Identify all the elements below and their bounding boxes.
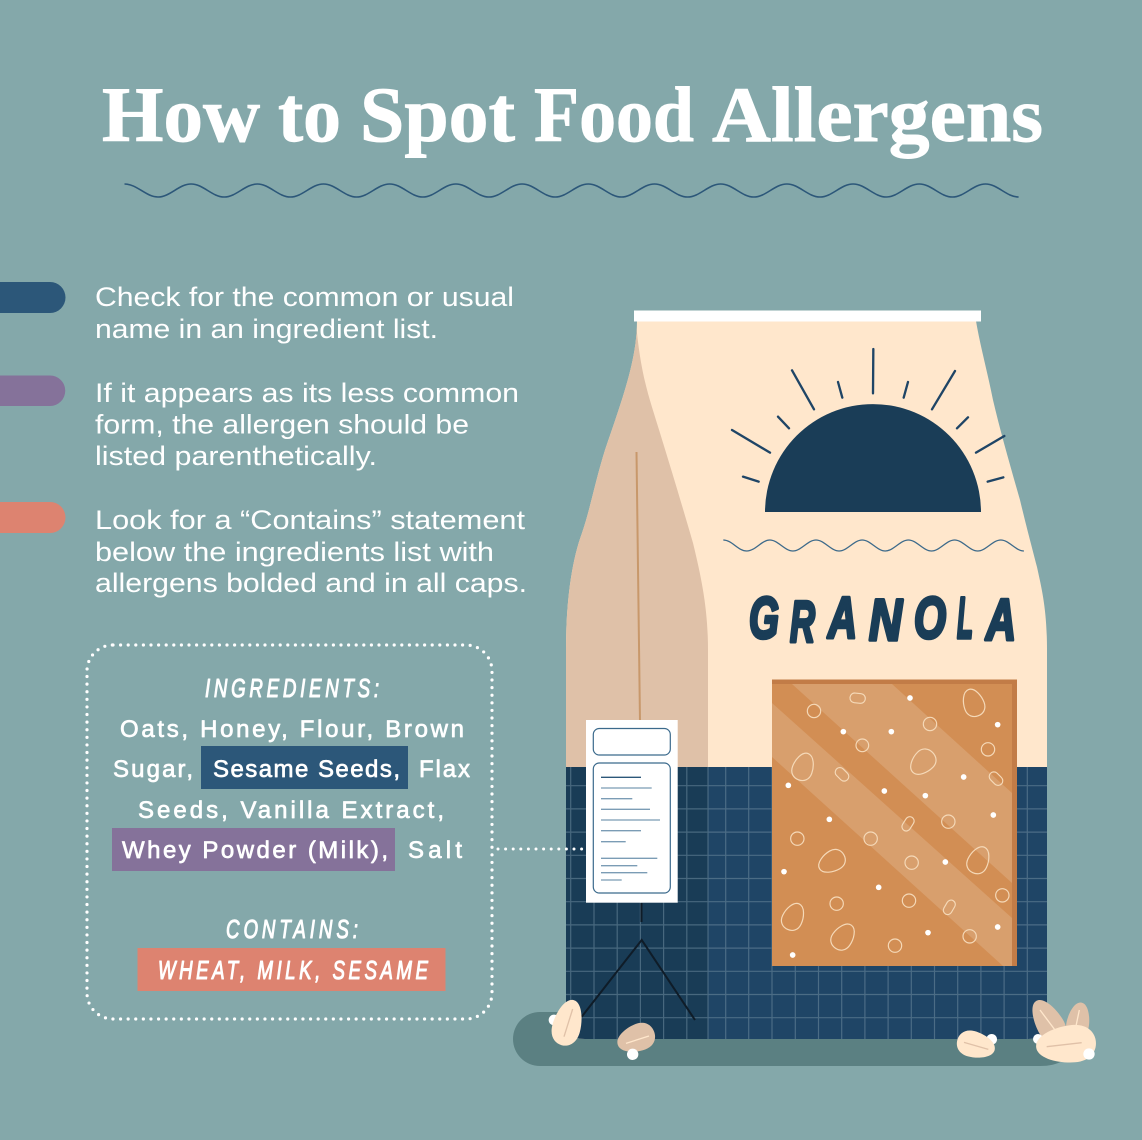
tip 1 text (95, 282, 514, 344)
ingredients heading: INGREDIENTS: (205, 673, 379, 703)
title (102, 71, 1043, 158)
granola bag (498, 310, 1098, 1066)
ingredient line 4: Salt (408, 837, 462, 864)
label header box (593, 728, 670, 755)
window base (772, 680, 1017, 966)
ground shadow (513, 1012, 1073, 1066)
centre fold line (636, 452, 640, 722)
tip 3 text: allergens bolded and in all caps. (95, 568, 527, 598)
bag ingredient label (586, 720, 678, 903)
granola window (772, 680, 1017, 966)
bag side base (560, 767, 708, 1047)
dotted connector from callout to bag label (498, 848, 586, 850)
ingredient line 3: Seeds, Vanilla Extract, (138, 797, 444, 824)
bag body (560, 315, 1055, 1047)
title: Allergens (712, 71, 1043, 158)
granola pieces (778, 686, 1009, 958)
tip 1 text: Check for the common or usual (95, 282, 514, 312)
tip 3 text: Look for a “Contains” statement (95, 505, 526, 535)
tip 2 text: If it appears as its less common (95, 378, 519, 408)
granola wordmark: O (914, 586, 946, 651)
ingredient line 2: Flax (419, 756, 470, 783)
tip 2 text (95, 378, 519, 471)
contains highlight (138, 948, 446, 991)
granola wordmark: A (985, 588, 1016, 653)
tip 2: less common form (0, 376, 519, 471)
window glare stripes (772, 684, 1012, 966)
sun logo (732, 349, 1004, 512)
sun rays (732, 349, 1004, 482)
granola wordmark: L (957, 586, 973, 651)
tip 1 text: name in an ingredient list. (95, 314, 438, 344)
granola wordmark: R (790, 590, 815, 655)
bag wavy divider (723, 540, 1024, 551)
ingredient line 4 (112, 828, 462, 871)
navy pill marker (0, 282, 66, 313)
granola wordmark: A (827, 586, 857, 651)
title: How (102, 71, 260, 158)
granola wordmark: G (749, 586, 779, 651)
white top seal strip (634, 310, 981, 322)
dotted callout border (87, 645, 492, 1019)
title: Food (534, 71, 694, 158)
title: Spot (360, 71, 515, 158)
contains highlight: WHEAT, MILK, SESAME (158, 955, 429, 985)
ingredient line 4: Whey Powder (Milk), (122, 837, 388, 864)
ingredient line 2 (113, 746, 470, 789)
contains heading: CONTAINS: (226, 914, 358, 944)
tip 1: common name (0, 282, 514, 344)
label card (586, 720, 678, 903)
label text box (593, 763, 670, 893)
ingredient line 1: Oats, Honey, Flour, Brown (120, 716, 464, 743)
ingredient line 2: Sesame Seeds, (213, 756, 400, 783)
title: to (278, 71, 341, 158)
granola wordmark: N (869, 588, 903, 653)
label text lines (601, 777, 660, 880)
right seeds (954, 994, 1098, 1066)
seeds on ground (548, 994, 1098, 1066)
half sun (765, 404, 981, 512)
tip 3 text: below the ingredients list with (95, 537, 494, 567)
granola wordmark (749, 586, 1016, 655)
tip 2 text: listed parenthetically. (95, 441, 377, 471)
tip 2 text: form, the allergen should be (95, 410, 469, 440)
title wavy underline (124, 184, 1019, 197)
tip 3 text (95, 505, 527, 598)
left seeds (548, 996, 659, 1060)
ingredient line 2: Sugar, (113, 756, 193, 783)
purple pill marker (0, 376, 65, 406)
tip 3: contains statement (0, 502, 527, 598)
lower stitch and gusset fold (582, 903, 695, 1020)
ingredient label callout (87, 645, 492, 1019)
bag navy base (708, 767, 1053, 1047)
coral pill marker (0, 502, 66, 533)
bag side gusset (560, 315, 708, 770)
